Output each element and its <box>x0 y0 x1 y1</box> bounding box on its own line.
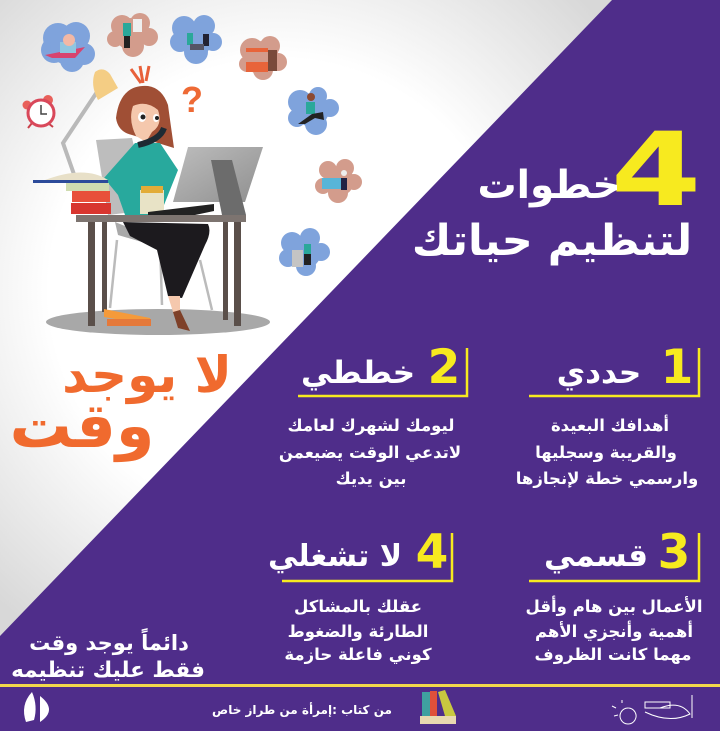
step 1: 1 <box>661 340 693 395</box>
icon: alarm clock <box>22 95 54 128</box>
slogan: no time: لا يوجد <box>62 346 232 405</box>
icon: presenter cloud <box>107 13 158 57</box>
brand signature <box>612 695 692 724</box>
icon: running cloud <box>288 87 339 135</box>
step 1 <box>516 340 699 489</box>
icon: stress marks <box>131 66 149 83</box>
step 2: بين يديك <box>336 469 406 489</box>
step 4: 4 <box>416 525 448 580</box>
orange folders on floor <box>104 309 151 326</box>
step 4: كوني فاعلة حازمة <box>284 645 432 665</box>
step 3: الأعمال بين هام وأقل <box>526 596 702 617</box>
step 3: أهمية وأنجزي الأهم <box>535 621 693 642</box>
main title <box>412 163 692 266</box>
step 2: 2 <box>428 340 460 395</box>
shadow under desk <box>46 309 270 335</box>
step 4 <box>268 525 452 665</box>
chair <box>96 138 212 310</box>
slogan: no time: وقت <box>10 389 154 462</box>
computer monitor and keyboard <box>148 147 263 215</box>
step 2: لاتدعي الوقت يضيعمن <box>279 443 461 463</box>
icon: books <box>420 690 456 724</box>
step 4: لا تشغلي <box>268 539 402 574</box>
step 2: خططي <box>301 355 415 391</box>
icon: luggage cloud <box>279 228 330 276</box>
icon: meeting cloud <box>170 15 222 64</box>
woman at desk <box>104 86 209 331</box>
icon: baby cloud <box>41 22 95 72</box>
logo: sail <box>24 692 49 722</box>
step 4: عقلك بالمشاكل <box>294 597 422 616</box>
book source credit: من كتاب :إمرأة من طراز خاص <box>212 702 392 717</box>
step 3: 3 <box>658 525 690 580</box>
step 2: ليومك لشهرك لعامك <box>288 416 454 436</box>
desk <box>76 215 246 326</box>
step 1: والقريبة وسجليها <box>535 443 677 463</box>
desk lamp <box>63 69 118 180</box>
icon: question mark: ? <box>181 79 203 120</box>
step 1: وارسمي خطة لإنجازها <box>516 469 698 489</box>
stack of books and folders <box>33 172 111 214</box>
closing message <box>11 627 205 683</box>
slogan: no time <box>10 346 232 462</box>
step 1: أهدافك البعيدة <box>551 415 669 435</box>
closing message: فقط عليك تنظيمه <box>11 658 205 683</box>
step 1: حددي <box>557 355 641 391</box>
step 2 <box>279 340 467 489</box>
closing message: دائماً يوجد وقت <box>29 627 189 655</box>
big number 4: 4 <box>611 110 701 229</box>
step 4: الطارئة والضغوط <box>288 622 428 642</box>
illustration: clouds of life activities <box>41 13 362 276</box>
main title: خطوات <box>477 163 621 208</box>
step 3: قسمي <box>544 538 648 574</box>
footer divider <box>0 684 720 687</box>
icon: kitchen cloud <box>239 36 287 80</box>
main title: لتنظيم حياتك <box>412 216 692 266</box>
icon: cleaning cloud <box>315 159 362 203</box>
step 3 <box>526 525 702 665</box>
step 3: مهما كانت الظروف <box>535 645 691 665</box>
